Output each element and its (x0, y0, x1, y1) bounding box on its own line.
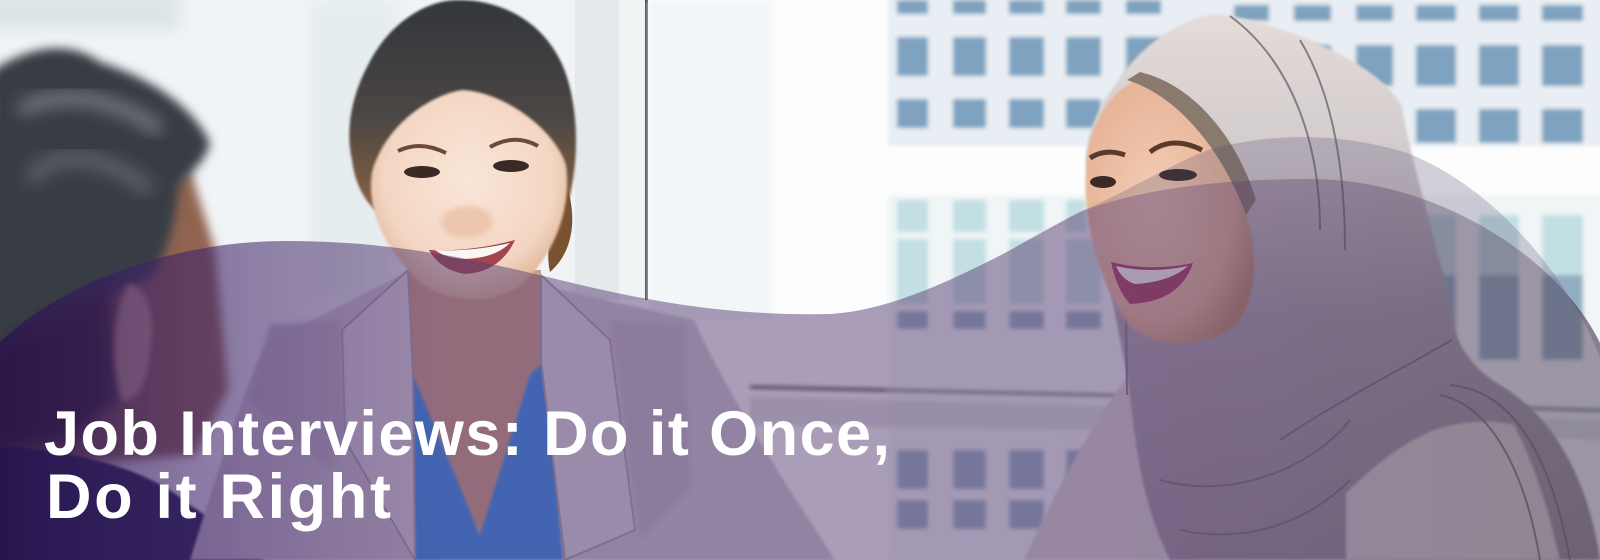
building windows (750, 0, 1600, 560)
mouth (429, 240, 515, 274)
blazer (190, 275, 835, 560)
shirt (0, 445, 268, 560)
face (371, 90, 567, 299)
title (44, 399, 890, 532)
neck and chest (408, 270, 541, 548)
title: Do it Right (46, 462, 391, 532)
shirt right (1346, 422, 1560, 560)
eyes and brows (398, 140, 538, 178)
person: woman in hijab, right (1024, 14, 1600, 560)
wave: purple overlay (0, 179, 1600, 560)
blue top (413, 360, 563, 560)
mouth (1111, 262, 1193, 304)
hijab folds (1126, 16, 1570, 560)
title: Job Interviews: Do it Once, (44, 399, 890, 469)
shirt left (1024, 360, 1200, 560)
lapels (342, 270, 415, 560)
person: man from behind, left (0, 48, 268, 560)
person: woman in blazer, centre (190, 0, 835, 560)
face (1085, 80, 1254, 343)
ear (114, 284, 152, 401)
wave: light upper layer (1000, 137, 1600, 357)
hair (349, 0, 576, 210)
hijab (1086, 14, 1600, 560)
eyes and brows (1090, 143, 1202, 188)
